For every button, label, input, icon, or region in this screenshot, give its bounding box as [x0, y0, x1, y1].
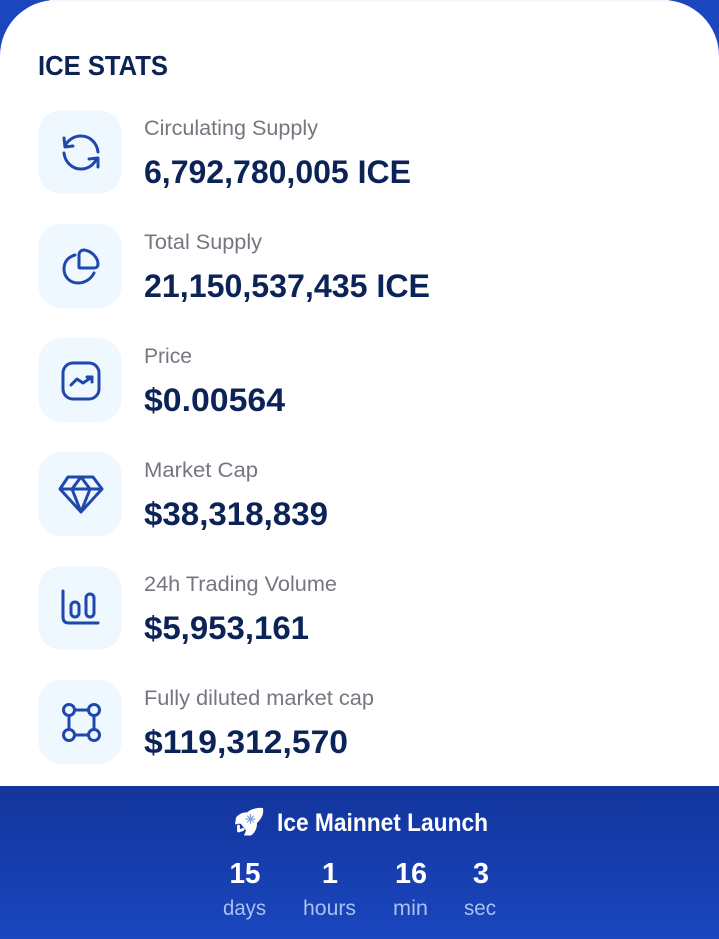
stat: 24h trading volume — [38, 566, 337, 650]
countdown: hours: hours — [303, 897, 356, 920]
stat: circulating supply — [38, 110, 411, 194]
countdown: days — [223, 858, 266, 920]
label: Circulating Supply — [144, 117, 318, 140]
countdown: minutes — [393, 858, 428, 920]
countdown: days: 15 — [230, 858, 260, 890]
icon: diamond — [38, 452, 122, 536]
stat: market cap — [38, 452, 328, 536]
title: ICE STATS — [38, 50, 168, 81]
countdown: minutes: min — [393, 897, 428, 920]
value: $5,953,161 — [144, 610, 309, 646]
icon: bar chart — [38, 566, 122, 650]
countdown: seconds: 3 — [473, 858, 489, 890]
value: $0.00564 — [144, 382, 285, 418]
launch heading: Ice Mainnet Launch — [277, 809, 488, 837]
value: $38,318,839 — [144, 496, 328, 532]
stat: total supply — [38, 224, 430, 308]
value: $119,312,570 — [144, 724, 348, 760]
countdown: hours: 1 — [322, 858, 338, 890]
value: 21,150,537,435 ICE — [144, 268, 430, 304]
stat: price — [38, 338, 285, 422]
icon: refresh arrows — [38, 110, 122, 194]
label: 24h Trading Volume — [144, 573, 337, 596]
panel: mainnet launch countdown — [0, 786, 719, 939]
countdown: days: days — [223, 897, 266, 920]
countdown: hours — [303, 858, 356, 920]
label: Market Cap — [144, 459, 258, 482]
label: Total Supply — [144, 231, 263, 254]
icon: trend chart — [38, 338, 122, 422]
countdown: seconds: sec — [464, 897, 496, 920]
stat: fully diluted market cap — [38, 680, 374, 764]
label: Price — [144, 345, 192, 368]
label: Fully diluted market cap — [144, 687, 374, 710]
countdown: seconds — [464, 858, 496, 920]
value: 6,792,780,005 ICE — [144, 154, 411, 190]
icon: connected nodes — [38, 680, 122, 764]
icon: pie chart — [38, 224, 122, 308]
icon: rocket — [235, 808, 263, 836]
countdown: minutes: 16 — [395, 858, 427, 890]
